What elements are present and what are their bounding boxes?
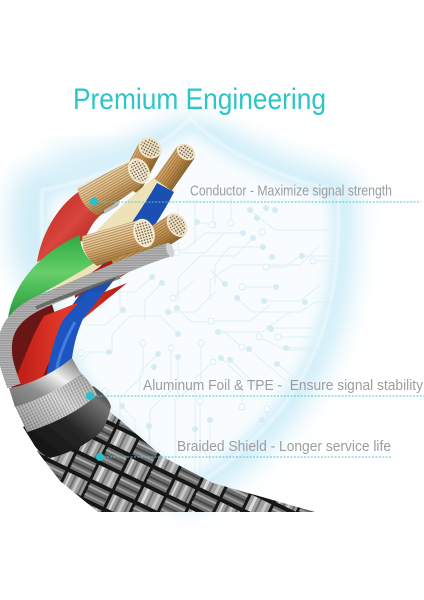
label: braided shield [96,439,392,461]
knurled foil band [14,372,97,432]
wire: beige insulator [46,176,174,300]
aluminum foil band [9,358,81,407]
label: braided shield: Braided Shield - Longer service life [177,439,391,455]
conductor: green wire [80,216,159,268]
wire: dark red lower [74,259,116,298]
circuit nodes hollow [78,220,316,412]
wire: rear conductor [118,134,165,194]
conductor strand bundle small [104,201,120,214]
wire: main red [13,283,127,386]
label: conductor [90,184,421,206]
braided shield [37,408,315,512]
wire: green [8,235,94,318]
wire: lower conductor [106,209,192,277]
black band [23,386,111,458]
circuit board pattern [75,190,340,475]
wire: blue lower [46,291,105,379]
conductor: red wire [75,152,157,219]
title: Premium Engineering [73,83,326,116]
wire: red upper [37,188,106,262]
cable illustration [5,134,315,512]
label: aluminum foil [86,378,424,400]
circuit nodes solid [106,205,308,432]
wire: blue upper [62,140,199,320]
highlight: blue wire [56,322,75,374]
wire: silver [5,242,176,386]
wire: dark backing [6,298,60,390]
